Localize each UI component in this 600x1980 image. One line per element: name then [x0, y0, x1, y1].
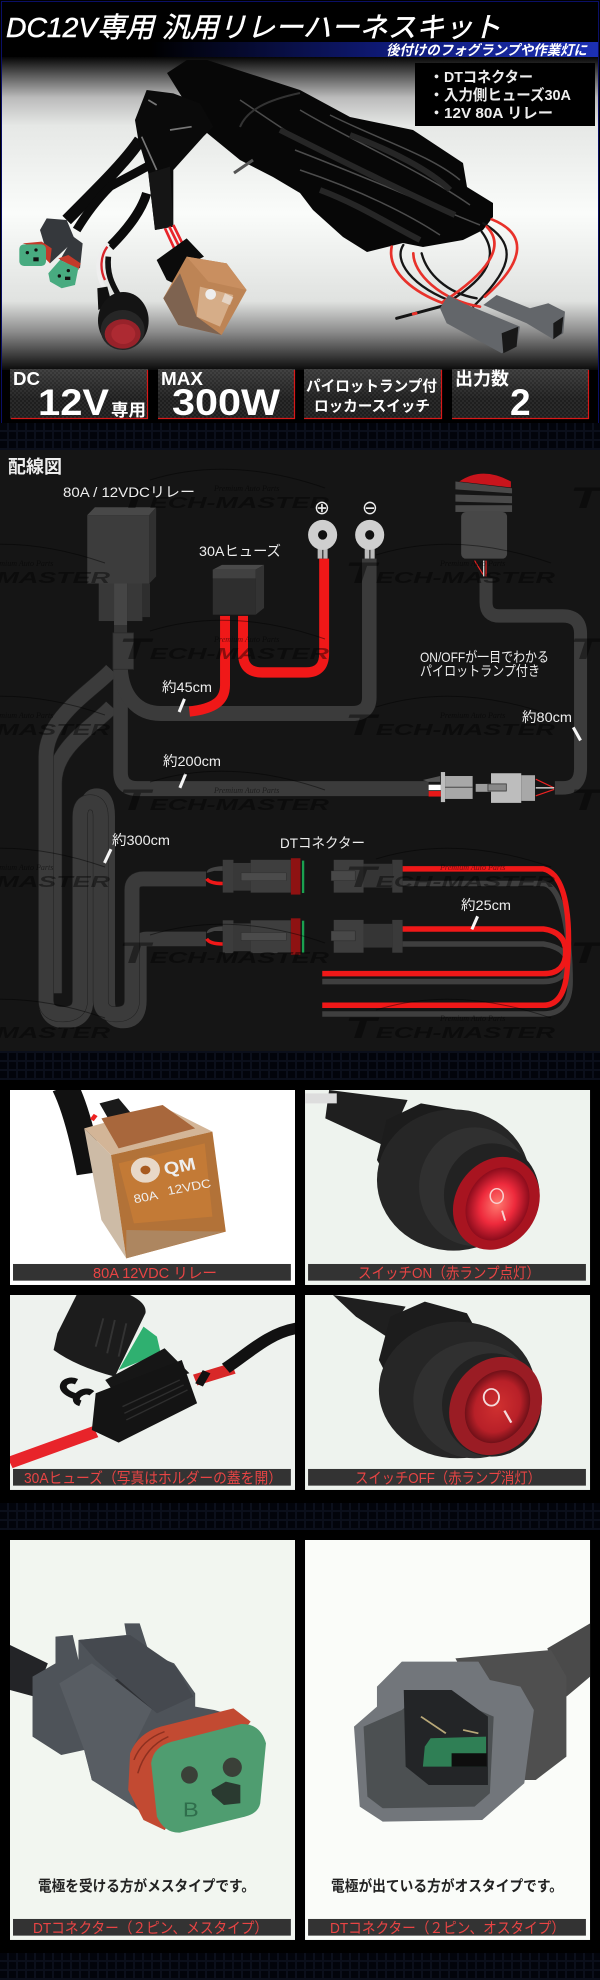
badge: pilot lamp rocker switch: ロッカースイッチ [314, 398, 430, 415]
photo: male DT connector [305, 1540, 590, 1940]
watermark pattern: T ECH-MASTER [119, 937, 330, 970]
spec list box [415, 63, 595, 126]
label: 80cm: 約80cm [522, 709, 572, 725]
badge: outputs 2: 2 [510, 382, 531, 423]
spec list box: DTコネクター [444, 69, 533, 86]
photo: switch off [305, 1295, 590, 1490]
spec list box: 入力側ヒューズ30A [444, 86, 571, 104]
red wires: fuse to battery [189, 559, 324, 712]
caption: DT male: DTコネクター（２ピン、オスタイプ） [330, 1920, 565, 1937]
caption: relay: 80A 12VDC リレー [93, 1265, 217, 1282]
inline connector [423, 772, 554, 803]
photo: relay: 80A [132, 1188, 160, 1206]
note: female type: 電極を受ける方がメスタイプです。 [38, 1877, 255, 1895]
symbol: minus: ⊖ [362, 497, 378, 519]
label: fuse: 30Aヒューズ [199, 543, 281, 559]
clear relay [157, 238, 247, 335]
cable: 300cm serpentine [46, 670, 206, 1021]
cable junction and branches [67, 90, 213, 295]
caption bars [13, 1919, 586, 1936]
photo: female DT connector [10, 1540, 295, 1940]
DT connectors: green faces [19, 218, 83, 288]
watermark pattern: Premium Auto Parts [213, 635, 279, 644]
rocker switch [97, 287, 149, 350]
spec list box: ・ [429, 87, 444, 104]
label: 300cm: 約300cm [112, 832, 170, 848]
spec list box: ・ [429, 69, 444, 86]
watermark pattern: T ECH-MASTER [345, 709, 556, 742]
coiled harness [167, 60, 493, 252]
watermark pattern: Premium Auto Parts [439, 863, 505, 872]
caption: DT female: DTコネクター（２ピン、メスタイプ） [33, 1920, 268, 1937]
watermark pattern: T ECH-MASTER [345, 1012, 556, 1045]
label: DT connector: DTコネクター [280, 835, 365, 851]
label: pilot lamp note: パイロットランプ付き [420, 663, 540, 679]
patterned divider bands [0, 423, 600, 1980]
photo: relay: QM [162, 1154, 198, 1179]
harness wires red and grey [322, 869, 570, 1014]
note: male type: 電極が出ている方がオスタイプです。 [331, 1877, 563, 1895]
caption bars [13, 1264, 586, 1486]
badge: pilot lamp rocker switch [304, 369, 442, 419]
subtitle bar [2, 42, 598, 58]
badge: DC 12V: 12V [38, 382, 109, 423]
spec list box: 12V 80A リレー [444, 105, 553, 122]
watermark pattern: Premium Auto Parts [439, 1014, 505, 1023]
wiring diagram [87, 474, 581, 1014]
length pointer ticks [104, 699, 581, 929]
subtitle bar: 後付けのフォグランプや作業灯に [386, 42, 588, 58]
label: 45cm: 約45cm [162, 679, 212, 695]
watermark pattern: Premium Auto Parts [439, 559, 505, 568]
spec list box: ・ [429, 105, 444, 122]
output wires [391, 219, 517, 318]
rocker switch drawing [455, 474, 512, 576]
label: pilot lamp note: ON/OFFが一目でわかる [420, 649, 549, 665]
photo: fuse holder [10, 1295, 297, 1490]
watermark pattern: T ECH-MASTER [345, 861, 556, 894]
label: relay: 80A / 12VDCリレー [63, 484, 195, 500]
cable: battery and ground [121, 559, 369, 714]
watermark pattern: T ECH-MASTER [119, 784, 330, 817]
watermark pattern: Premium Auto Parts [439, 711, 505, 720]
ring terminals [308, 520, 384, 559]
fuse holder [213, 565, 264, 615]
label: pilot lamp note [420, 649, 549, 679]
detail photos: relay, switch, fuse [10, 1087, 590, 1490]
watermark pattern: Premium Auto Parts [213, 786, 279, 795]
caption: switch off: スイッチOFF（赤ランプ消灯） [355, 1470, 541, 1487]
badge: DC 12V: DC [13, 369, 40, 389]
watermark pattern: Premium Auto Parts [213, 484, 279, 493]
detail photos: DT connectors [10, 1540, 590, 1940]
label: 200cm: 約200cm [163, 753, 221, 769]
heading: wiring diagram: 配線図 [8, 457, 62, 477]
badge: DC 12V [10, 369, 148, 423]
title: DC12V専用 汎用リレーハーネスキット [6, 12, 501, 43]
switch cable [486, 578, 581, 788]
photo: switch on [305, 1090, 590, 1285]
label: 25cm: 約25cm [461, 897, 511, 913]
caption: fuse: 30Aヒューズ（写真はホルダーの蓋を開） [24, 1469, 282, 1487]
relay [87, 507, 156, 669]
symbol: plus: ⊕ [314, 497, 330, 519]
watermark pattern: T ECH-MASTER [345, 557, 556, 590]
watermark pattern: T ECH-MASTER [119, 482, 330, 515]
photo: female DT connector: B [183, 1798, 199, 1821]
hero photo: harness kit [2, 57, 598, 370]
badge: pilot lamp rocker switch: パイロットランプ付 [306, 378, 437, 395]
caption: switch on: スイッチON（赤ランプ点灯） [358, 1265, 540, 1282]
DT connector pair: top [207, 858, 403, 895]
grey connectors [440, 295, 565, 353]
DT connector pair: bottom [207, 918, 403, 955]
header frame line [2, 2, 598, 423]
badge: outputs 2 [452, 369, 589, 423]
watermark pattern [0, 469, 600, 1045]
badge: outputs 2: 出力数 [455, 369, 509, 389]
photo: relay [10, 1087, 295, 1285]
badge: MAX 300W [158, 369, 295, 423]
cable: 200cm [121, 669, 429, 789]
panel: wiring diagram background [0, 450, 600, 1051]
watermark pattern: T ECH-MASTER [119, 633, 330, 666]
badge: MAX 300W: 300W [172, 382, 280, 423]
photo: relay: 12VDC [166, 1176, 212, 1198]
badge: MAX 300W: MAX [161, 369, 203, 389]
badge: DC 12V: 専用 [111, 401, 146, 420]
